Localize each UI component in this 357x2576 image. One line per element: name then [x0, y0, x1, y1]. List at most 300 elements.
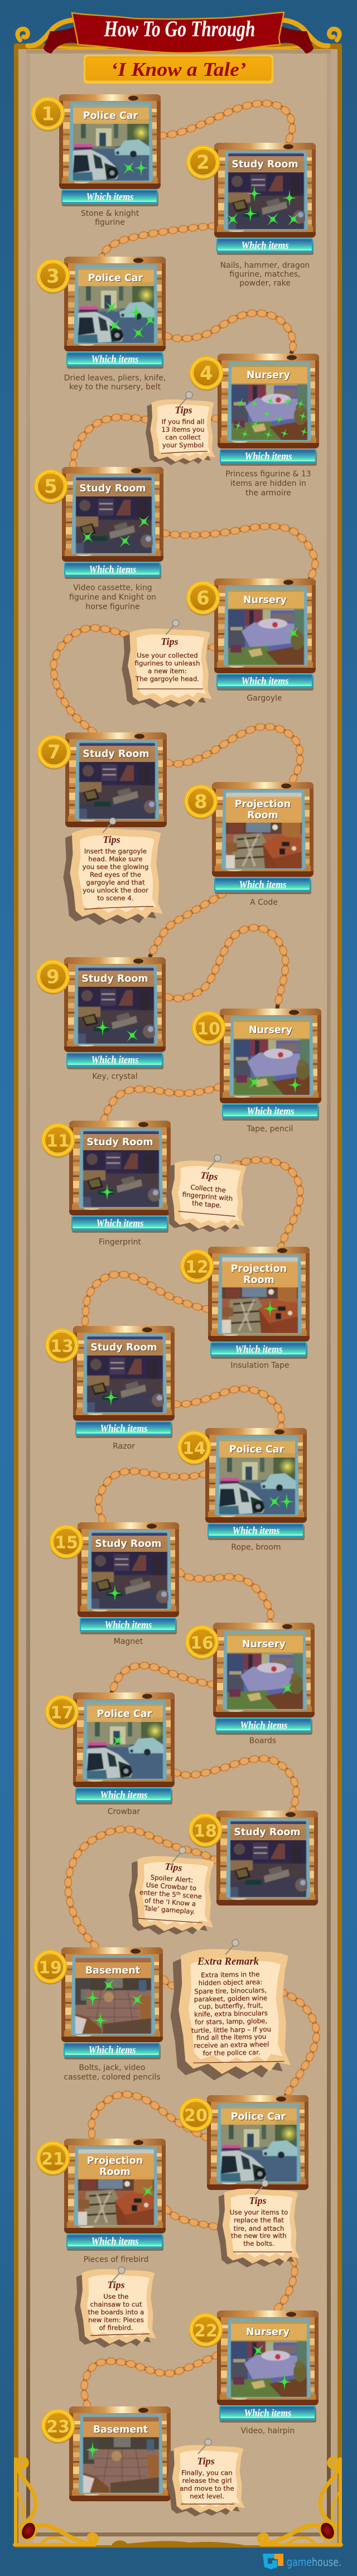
pin	[112, 2267, 125, 2282]
medal 4	[190, 356, 223, 390]
pin	[166, 620, 179, 635]
frame with nursery scene	[214, 578, 316, 673]
frame with study room scene: Study Room	[79, 483, 146, 494]
subtitle plate	[84, 55, 273, 84]
medal 11: 11	[46, 1131, 70, 1151]
which items button	[66, 352, 163, 369]
pin	[179, 392, 192, 407]
items: Magnet	[114, 1637, 143, 1646]
medal 18	[189, 1813, 222, 1847]
medal 19	[33, 1950, 67, 1985]
frame with nursery scene	[218, 354, 319, 448]
medal 19: 19	[38, 1958, 62, 1978]
tip text: tire, and attach	[234, 2225, 284, 2232]
medal 22	[189, 2313, 223, 2347]
frame with nursery scene: Nursery	[243, 595, 287, 606]
note text: knife, extra binoculars	[194, 2009, 268, 2018]
tip text: Finally, you can	[181, 2469, 233, 2477]
tip text: the bolts.	[243, 2240, 274, 2247]
tip text: fingerprint with	[182, 1190, 233, 1203]
step 11: Study Room	[41, 1121, 171, 1247]
tip text: figurines to unleash	[134, 659, 200, 667]
which items button	[214, 877, 311, 894]
rope: step 21 to 22	[166, 2209, 295, 2309]
frame with police car scene	[207, 2095, 308, 2190]
step 15: Study Room	[50, 1522, 179, 1646]
which items button	[219, 2406, 316, 2423]
items: Crowbar	[108, 1807, 140, 1816]
gold crest and scrolls	[17, 20, 340, 49]
frame with study room scene	[62, 467, 163, 562]
which items button: Which items	[240, 1720, 288, 1731]
tip text: a new item:	[148, 667, 187, 675]
medal 13	[45, 1329, 79, 1363]
items: Stone & knight	[81, 209, 139, 218]
medal 20: 20	[184, 2106, 208, 2125]
left corner	[15, 2459, 97, 2545]
sparkles	[276, 1677, 298, 1700]
tip text: of the ‘I Know a	[144, 1897, 196, 1908]
parchment	[164, 1159, 248, 1234]
tip text: Collect the	[190, 1183, 226, 1194]
medal 2	[186, 145, 220, 180]
tip heading: Tips	[197, 2456, 215, 2467]
which items button: Which items	[244, 451, 292, 462]
medal 6: 6	[196, 587, 210, 609]
frame with nursery scene: Nursery	[249, 1025, 293, 1036]
step 14: Police Car	[177, 1428, 307, 1552]
sparkles	[263, 1490, 294, 1513]
tip heading: Tips	[175, 404, 192, 416]
tip text: The gargoyle head.	[135, 675, 199, 683]
sparkles	[282, 622, 305, 644]
sparkles	[85, 2442, 100, 2458]
step 13: Study Room	[45, 1326, 175, 1451]
items: powder, rake	[239, 279, 291, 288]
which items button	[71, 1216, 168, 1233]
rope: step 9 to 10	[167, 928, 286, 1009]
medal 5	[34, 470, 67, 504]
frame with projection room scene	[64, 2139, 166, 2234]
frame with police car scene	[73, 1692, 175, 1787]
which items button: Which items	[100, 1789, 147, 1801]
rope: step 16 to 17	[112, 1666, 213, 1693]
rope: step 3 to 4	[166, 313, 293, 354]
rope: step 4 to 5	[73, 417, 218, 467]
sparkles	[100, 296, 161, 344]
parchment	[128, 1855, 216, 1937]
medal 12: 12	[185, 1257, 209, 1277]
medal 2: 2	[196, 152, 210, 174]
step 4: Nursery	[190, 354, 319, 498]
gamehouse logo	[263, 2554, 341, 2569]
items: Dried leaves, pliers, knife,	[64, 374, 166, 383]
which items button	[210, 1342, 307, 1359]
frame with nursery scene	[213, 1623, 315, 1718]
items: cassette, colored pencils	[64, 2073, 161, 2082]
frame with projection room scene	[208, 1247, 310, 1342]
step 20: Police Car	[179, 2095, 308, 2190]
frame with study room scene: Study Room	[95, 1538, 162, 1550]
items: Key, crystal	[92, 1072, 138, 1081]
rope: step 17 to 18	[175, 1759, 296, 1811]
step 23: Basement	[41, 2406, 171, 2501]
items: Bolts, jack, video	[79, 2063, 146, 2072]
frame with nursery scene	[220, 1009, 321, 1103]
step 19: Basement	[33, 1947, 163, 2082]
tip text: head. Make sure	[88, 855, 143, 863]
extra remark note	[171, 1940, 291, 2081]
frame with projection room scene: Projection	[87, 2155, 143, 2167]
items: Nails, hammer, dragon	[220, 261, 310, 270]
medal 6	[186, 581, 220, 616]
ribbon tails	[44, 26, 313, 54]
tip text: chainsaw to cut	[90, 2300, 142, 2308]
tip text: Use your collected	[137, 652, 198, 659]
sparkles	[100, 1184, 114, 1200]
frame with police car scene: Police Car	[229, 1444, 284, 1455]
tip heading: Tips	[164, 1860, 183, 1874]
medal 17	[45, 1695, 79, 1729]
rope: step 22 to 23	[84, 2355, 218, 2408]
which items button: Which items	[232, 1525, 280, 1537]
which items button	[64, 2043, 161, 2059]
which items button: Which items	[244, 2408, 291, 2419]
items: Rope, broom	[231, 1543, 281, 1552]
tip text: next level.	[190, 2492, 224, 2500]
rope: step 5 to 6	[164, 526, 315, 579]
step 17: Police Car	[45, 1692, 175, 1816]
items: Video, hairpin	[241, 2427, 295, 2435]
medal 13: 13	[50, 1337, 74, 1357]
frame with police car scene	[205, 1428, 307, 1523]
note text: turtle, little harp – If you	[191, 2025, 271, 2034]
parchment	[217, 2189, 300, 2268]
tip heading: Tips	[107, 2279, 125, 2290]
step 10: Nursery	[192, 1009, 321, 1133]
which items button: Which items	[100, 1423, 147, 1435]
note text: for stars, lamp, globe,	[195, 2017, 267, 2026]
note text: hidden object area:	[199, 1978, 262, 1987]
items: Razor	[113, 1442, 135, 1451]
tip heading: Tips	[161, 636, 178, 647]
tip text: your Symbol	[162, 441, 204, 449]
medal 18: 18	[194, 1822, 217, 1841]
rope: step 20 to 21	[91, 2094, 207, 2139]
step 22: Nursery	[189, 2310, 319, 2435]
medal 1	[31, 97, 65, 132]
gold corner ornaments	[15, 2459, 341, 2545]
parchment	[64, 828, 163, 925]
step 12: Projection Room	[180, 1247, 310, 1370]
which items button: Which items	[96, 1218, 144, 1229]
note text	[190, 1970, 284, 2063]
which items button: Which items	[241, 240, 289, 252]
tip text: the tape.	[192, 1199, 222, 1209]
tip text: Tale’ gameplay.	[143, 1904, 195, 1916]
rope: step 15 to 16	[180, 1572, 271, 1623]
tip text: Insert the gargoyle	[84, 847, 147, 855]
which items button: Which items	[247, 1106, 295, 1117]
note text: find all the items you	[196, 2033, 266, 2042]
items: figurine	[95, 218, 125, 227]
frame with projection room scene: Projection	[231, 1263, 287, 1275]
medal 16: 16	[190, 1633, 214, 1653]
which items button: Which items	[105, 1619, 152, 1631]
right corner	[259, 2459, 341, 2545]
which items button: Which items	[91, 354, 138, 365]
items: the armoire	[245, 489, 291, 498]
which items button: Which items	[91, 1054, 138, 1066]
pin	[103, 818, 116, 833]
frame with projection room scene: Room	[243, 1275, 274, 1286]
frame with police car scene: Police Car	[88, 273, 143, 284]
which items button	[222, 1104, 319, 1121]
frame with study room scene	[73, 1326, 175, 1421]
frame with police car scene: Police Car	[97, 1709, 152, 1720]
which items button: Which items	[91, 2236, 138, 2247]
tip text: scene	[180, 1891, 202, 1900]
note text: Spare tire, binoculars,	[194, 1986, 267, 1995]
sparkles	[118, 157, 148, 179]
frame with police car scene: Police Car	[231, 2111, 286, 2122]
tip text: the boards into a	[88, 2308, 144, 2316]
frame with study room scene: Study Room	[81, 973, 148, 985]
tip text: of firebird.	[99, 2324, 133, 2332]
tip text: 13 items you	[162, 426, 204, 433]
sparkles	[95, 1019, 143, 1046]
tip: replace flat tire	[217, 2180, 300, 2268]
medal 17: 17	[50, 1704, 74, 1723]
which items button: Which items	[89, 564, 136, 576]
sparkles	[107, 1729, 129, 1752]
tip text: you unlock the door	[83, 886, 148, 894]
frame with study room scene	[64, 957, 166, 1052]
tip text: Spoiler Alert:	[150, 1873, 194, 1884]
which items button	[220, 449, 317, 466]
tip heading: Tips	[200, 1169, 219, 1183]
rope: step 12 to 13	[85, 1274, 208, 1326]
logo text: gamehouse.	[287, 2555, 341, 2569]
tip text: gargoyle and that	[86, 879, 145, 886]
tip text: enter the 5	[139, 1888, 202, 1900]
frame with study room scene	[65, 732, 167, 827]
note text: cup, butterfly, fruit,	[199, 2001, 263, 2010]
items: items are hidden in	[230, 479, 306, 488]
frame with projection room scene: Room	[247, 810, 278, 821]
parchment	[167, 2445, 245, 2516]
tip: figurines	[122, 620, 212, 708]
which items button	[64, 562, 161, 579]
frame with study room scene: Study Room	[234, 1827, 301, 1838]
which items button	[216, 674, 313, 691]
step 21: Projection Room	[36, 2139, 166, 2264]
tip text: new item: Pieces	[88, 2316, 144, 2324]
medal 22: 22	[194, 2322, 218, 2341]
which items button	[61, 190, 158, 206]
which items button	[75, 1421, 172, 1438]
frame with study room scene: Study Room	[86, 1137, 153, 1148]
tip text: you see the glowing	[83, 863, 148, 871]
medal 15: 15	[55, 1533, 78, 1553]
frame with nursery scene: Nursery	[242, 1639, 286, 1650]
pin	[255, 2180, 268, 2195]
tip text: Use Crowbar to	[146, 1881, 197, 1892]
tip heading: Tips	[249, 2195, 267, 2206]
frame with study room scene: Study Room	[231, 159, 298, 170]
medal 10: 10	[197, 1020, 220, 1039]
which items button: Which items	[235, 1344, 282, 1355]
tip text: can collect	[165, 433, 201, 441]
medal 23: 23	[46, 2418, 70, 2437]
medal 11	[41, 1123, 75, 1158]
tip text	[178, 1183, 238, 1217]
items: Insulation Tape	[230, 1361, 290, 1370]
medal 21: 21	[41, 2150, 65, 2169]
frame with study room scene	[214, 143, 316, 238]
tip: spoiler alert	[128, 1847, 216, 1937]
tip text: Red eyes of the	[90, 871, 141, 879]
medal 8	[184, 784, 218, 819]
pin	[172, 1847, 186, 1862]
frame with study room scene	[69, 1121, 171, 1215]
step 9: Study Room	[36, 957, 166, 1081]
items: A Code	[250, 898, 278, 907]
frame with police car scene: Police Car	[83, 110, 138, 122]
items: Gargoyle	[247, 694, 282, 703]
medal 8: 8	[194, 791, 208, 813]
note text: Extra items in the	[201, 1970, 260, 1979]
items: Princess figurine & 13	[225, 470, 311, 479]
frame with projection room scene	[212, 782, 313, 877]
rope: step 19 to 20	[164, 1979, 316, 2096]
note text: receive an extra wheel	[194, 2040, 269, 2049]
sparkles	[232, 395, 310, 441]
medal 16	[185, 1625, 219, 1660]
tip text: Use your items to	[230, 2208, 288, 2216]
tip heading: Tips	[103, 834, 120, 845]
step 18: Study Room	[189, 1811, 318, 1906]
pin	[225, 1940, 239, 1955]
frame with police car scene	[64, 257, 166, 351]
step 16: Nursery	[185, 1623, 315, 1745]
items: key to the nursery, belt	[69, 383, 161, 392]
step 3: Police Car	[36, 257, 166, 392]
sparkles	[108, 1585, 122, 1601]
tip: fingerprint	[164, 1155, 248, 1234]
frame with police car scene	[59, 94, 161, 189]
pin	[198, 2439, 211, 2454]
rope: step 1 to 2	[161, 103, 292, 143]
step 2: Study Room	[186, 143, 316, 288]
step 6: Nursery	[186, 578, 316, 703]
sparkles	[104, 1389, 118, 1406]
rope: step 6 to 7	[54, 628, 215, 732]
medal 9: 9	[46, 966, 60, 988]
rope: step 11 to 12	[167, 1160, 301, 1248]
note text: for the police car.	[203, 2048, 260, 2057]
rope: step 14 to 15	[98, 1471, 205, 1523]
tip text: to scene 4.	[97, 894, 134, 902]
medal 23	[41, 2409, 75, 2443]
medal 14: 14	[182, 1439, 206, 1458]
medal 15	[50, 1525, 83, 1560]
which items button: Which items	[241, 676, 289, 687]
main ribbon	[72, 12, 284, 53]
frame with study room scene	[216, 1811, 318, 1906]
frame with nursery scene: Nursery	[247, 370, 291, 381]
which items button: Which items	[86, 191, 134, 203]
rope: step 13 to 14	[175, 1389, 282, 1429]
step 7: Study Room	[37, 732, 167, 827]
rope: step 8 to 9	[149, 894, 223, 957]
medal 21	[36, 2141, 70, 2175]
pin	[208, 1155, 221, 1170]
frame with basement scene: Basement	[93, 2424, 148, 2435]
medal 20	[179, 2097, 213, 2132]
frame with basement scene	[69, 2406, 171, 2501]
medal 7	[37, 735, 71, 770]
medal 7: 7	[47, 741, 61, 763]
subtitle plate: ‘I Know a Tale’	[110, 59, 247, 80]
tip text	[138, 1873, 205, 1923]
parchment	[146, 399, 215, 465]
step 5: Study Room	[34, 467, 163, 611]
medal 14	[177, 1430, 211, 1465]
rope: step 7 to 8	[167, 727, 300, 782]
medal 3	[36, 259, 70, 293]
parchment	[75, 2269, 156, 2348]
tip text: th	[176, 1891, 181, 1896]
frame with nursery scene: Nursery	[246, 2327, 290, 2338]
medal 9	[36, 959, 70, 994]
note heading: Extra Remark	[197, 1956, 259, 1967]
title ribbon with gold crest	[17, 12, 340, 54]
which items button	[66, 2234, 163, 2251]
items: Video cassette, king	[73, 583, 152, 592]
which items button	[75, 1788, 172, 1805]
items: Tape, pencil	[246, 1125, 293, 1133]
tip text: release the girl	[182, 2477, 231, 2485]
tip text: replace the flat	[234, 2216, 284, 2224]
rope: step 2 to 3	[102, 226, 214, 257]
sparkles	[137, 2180, 159, 2202]
rope: step 18 to 19	[68, 1829, 216, 1948]
parchment	[122, 629, 212, 708]
which items button: Which items	[239, 879, 287, 891]
frame with basement scene: Basement	[85, 1965, 140, 1976]
note text: parakeet, golden wine	[194, 1994, 267, 2003]
which items button	[66, 1053, 163, 1069]
medal 4: 4	[200, 363, 213, 385]
sparkles	[76, 510, 155, 552]
tip text: If you find all	[162, 418, 204, 426]
step 8: Projection Room	[184, 782, 313, 907]
medal 5: 5	[44, 475, 57, 498]
medal 1: 1	[41, 103, 55, 125]
items: horse figurine	[85, 602, 140, 611]
title text: How To Go Through	[104, 16, 255, 41]
sparkles	[263, 1300, 277, 1317]
items: figurine, matches,	[229, 270, 301, 279]
tip: gargoyle head	[64, 818, 163, 925]
step 1: Police Car	[31, 94, 161, 227]
frame with study room scene	[78, 1522, 179, 1617]
sparkles	[85, 1974, 148, 2029]
frame with study room scene: Study Room	[83, 749, 149, 760]
medal 3: 3	[46, 266, 60, 288]
frame with projection room scene: Projection	[235, 799, 291, 810]
